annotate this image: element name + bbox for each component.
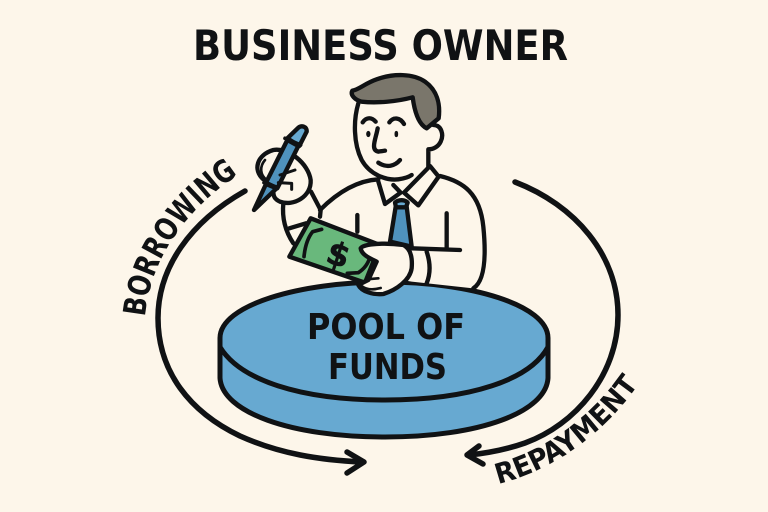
eyes (367, 131, 370, 137)
repayment label: REPAYMENT (494, 372, 635, 484)
torso and shirt (320, 176, 485, 288)
nose (374, 128, 385, 152)
hair (352, 75, 439, 128)
fingers on pen (278, 170, 295, 189)
head (352, 75, 442, 180)
disc label: FUNDS (328, 347, 447, 388)
banknote: $ (322, 233, 355, 276)
arm holding pen (283, 192, 321, 243)
disc label: POOL OF (307, 307, 465, 348)
borrowing label: BORROWING (122, 158, 236, 315)
panel: pool of funds disc (220, 282, 548, 437)
title: BUSINESS OWNER (193, 21, 568, 70)
disc label (307, 307, 465, 388)
hand holding banknote (358, 244, 412, 294)
eyebrows (363, 118, 376, 122)
writing hand (257, 150, 311, 203)
repayment arrow (467, 182, 618, 464)
collar and tie (378, 166, 439, 247)
pen (254, 126, 307, 210)
mouth (378, 160, 400, 166)
illustration: business owner (254, 75, 485, 294)
banknote (289, 218, 380, 283)
borrowing arrow (158, 191, 364, 473)
